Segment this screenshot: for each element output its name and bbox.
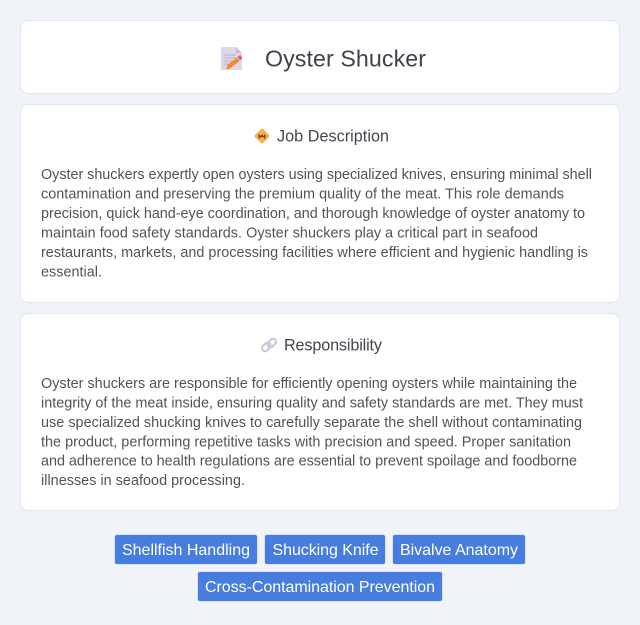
tag: cross-contamination prevention: Cross-Contamination Prevention — [205, 579, 435, 596]
text block: job description body: contamination and preserving the premium quality of the meat. This role demands — [41, 186, 564, 202]
text block: job description body: precision, quick hand-eye coordination, and thorough knowledge of oyster anatomy to — [41, 206, 585, 222]
text block: job description body: Oyster shuckers expertly open oysters using specialized knives, ensuring minimal shell — [41, 167, 592, 183]
tag: shucking knife: Shucking Knife — [272, 542, 379, 559]
panel: title header — [20, 20, 620, 94]
tag: shellfish handling: Shellfish Handling — [122, 542, 250, 559]
tag: bivalve anatomy — [392, 534, 526, 564]
heading: job description: Job Description — [277, 128, 389, 146]
icon: memo with pencil — [221, 47, 242, 70]
text block: job description body: essential. — [41, 264, 102, 280]
text block: job description body: maintain food safety standards. Oyster shuckers play a critical part in seafood — [41, 226, 538, 242]
skill tags — [114, 534, 526, 602]
text block: responsibility body: Oyster shuckers are responsible for efficiently opening oysters while maintaining the — [41, 376, 577, 392]
text block: responsibility body: illnesses in seafood processing. — [41, 473, 245, 489]
text block: job description body — [41, 167, 592, 280]
panel: job description — [20, 104, 620, 302]
tag: cross-contamination prevention — [198, 572, 442, 602]
text block: responsibility body: integrity of the meat inside, ensuring quality and safety standards are met. They must — [41, 396, 583, 412]
tag: shellfish handling — [114, 534, 258, 564]
icon: orange diamond sign — [254, 128, 270, 144]
icon: chain link — [261, 338, 277, 352]
title: Oyster Shucker — [265, 46, 426, 72]
text block: responsibility body: the product, performing repetitive tasks with precision and speed. Proper sanitation — [41, 434, 571, 450]
text block: responsibility body: use specialized shucking knives to carefully separate the shell without contaminating — [41, 415, 582, 431]
panel: responsibility — [20, 314, 620, 510]
tag: bivalve anatomy: Bivalve Anatomy — [400, 542, 518, 559]
text block: responsibility body — [41, 376, 583, 489]
tag: shucking knife — [264, 534, 386, 564]
text block: responsibility body: and adherence to health regulations are essential to prevent spoilage and foodborne — [41, 454, 577, 470]
text block: job description body: restaurants, markets, and processing facilities where efficient and hygienic handling is — [41, 245, 588, 261]
heading: responsibility: Responsibility — [284, 336, 383, 354]
